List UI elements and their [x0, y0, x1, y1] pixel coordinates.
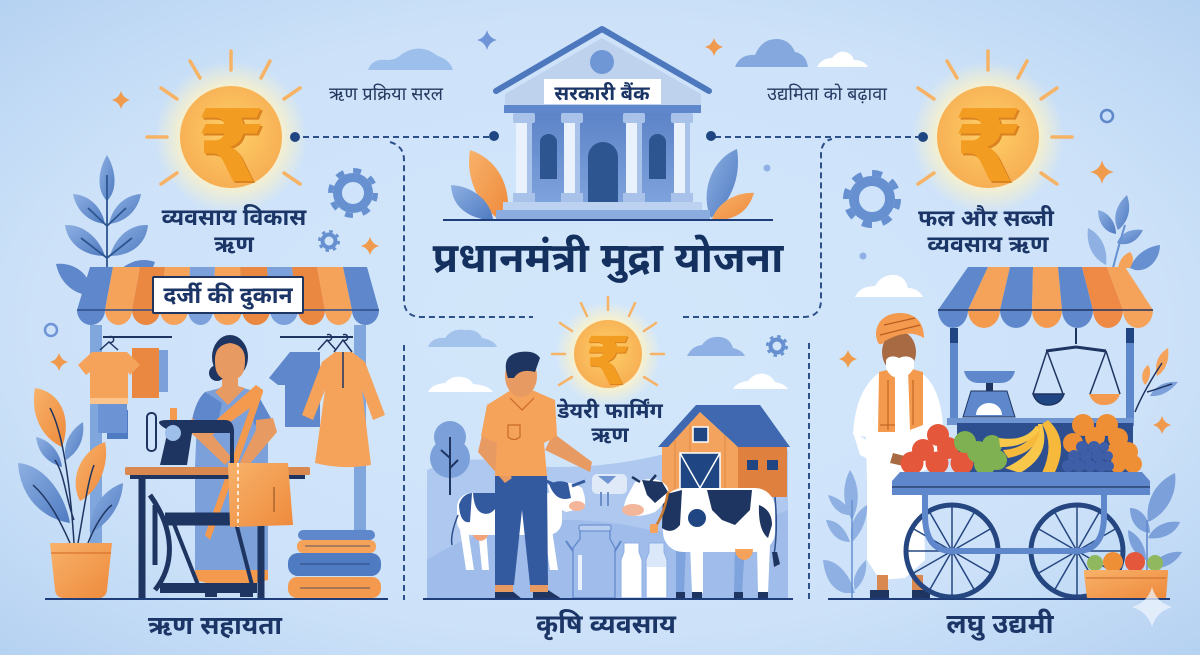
- fruit basket: [1084, 552, 1168, 598]
- connector dots: [290, 131, 928, 142]
- text: business growth loan: व्यवसाय विकास: [161, 204, 307, 230]
- farmer vendor: [853, 313, 945, 598]
- text: business growth loan: ऋण: [214, 231, 254, 257]
- steps: [503, 202, 702, 210]
- farmer man: [478, 352, 592, 599]
- columns: [513, 113, 693, 202]
- balance: [1033, 328, 1120, 405]
- title: प्रधानमंत्री मुद्रा योजना: [433, 234, 784, 283]
- icon: right rupee coin: ₹: [953, 88, 1023, 205]
- text: dairy farming loan: डेयरी फार्मिंग: [556, 398, 663, 423]
- hanging clothes left: [78, 336, 168, 439]
- label: agri business: कृषि व्यवसाय: [536, 609, 677, 640]
- icon: left rupee coin: ₹: [196, 88, 266, 205]
- panel: dairy farm: [427, 352, 790, 599]
- orange cloth: [228, 463, 293, 527]
- text: dairy farming loan: ऋण: [591, 423, 629, 447]
- shop sign: दर्जी की दुकान: [163, 282, 294, 310]
- right foliage: [1128, 473, 1182, 570]
- dairy ground line: [423, 598, 793, 600]
- weighing scale: [963, 371, 1015, 417]
- icon: right rupee coin: ₹: [955, 90, 1025, 207]
- label: small entrepreneur: लघु उद्यमी: [946, 608, 1055, 640]
- bank ground line: [443, 219, 773, 221]
- door and windows: [540, 134, 666, 202]
- bank building: [451, 29, 754, 220]
- icon: centre rupee coin: ₹: [586, 324, 632, 401]
- leaves beside bank: [451, 149, 754, 220]
- tree: [430, 421, 470, 495]
- shop sign: [153, 277, 303, 313]
- cart table: [892, 472, 1150, 495]
- clouds and sparkles: [45, 30, 1171, 434]
- bank sign: [544, 79, 661, 105]
- text: fruit and vegetable loan: व्यवसाय ऋण: [927, 231, 1049, 257]
- panel: tailor shop: [18, 155, 385, 598]
- panel: fruit vendor: [823, 195, 1182, 598]
- main cow: [622, 475, 780, 599]
- bank sign: सरकारी बैंक: [554, 81, 650, 105]
- hanging clothes right: [269, 334, 385, 467]
- icon: gears: [319, 170, 898, 356]
- tailor ground line: [45, 598, 388, 600]
- milk can and bottles: [566, 525, 667, 598]
- left foliage: [823, 470, 867, 598]
- wall: [530, 113, 676, 202]
- dashed connector lines: [303, 137, 918, 600]
- plant behind shop: [56, 155, 155, 296]
- barn: [658, 405, 790, 497]
- hanging rods: [103, 336, 353, 338]
- fabric stack: [288, 530, 381, 598]
- text: promoting entrepreneurship: उद्यमिता को बढ़ावा: [767, 84, 887, 104]
- awning: [77, 267, 379, 325]
- text: fruit and vegetable loan: फल और सब्जी: [918, 205, 1055, 231]
- cart back and posts: [947, 328, 1134, 473]
- fruits: [900, 414, 1142, 475]
- roof: [505, 38, 701, 105]
- shop posts: [90, 325, 366, 598]
- label: loan support: ऋण सहायता: [148, 610, 283, 640]
- cart wheels: [906, 495, 1123, 597]
- icon: centre rupee coin: ₹: [585, 323, 631, 400]
- icon: left rupee coin: [147, 51, 307, 213]
- tailor woman: [188, 335, 277, 597]
- text: loan process simple: ऋण प्रक्रिया सरल: [329, 84, 444, 104]
- sparkle watermark: [1132, 587, 1172, 627]
- icon: centre rupee coin: [552, 297, 664, 406]
- cow behind man: [452, 481, 585, 570]
- icon: left rupee coin: ₹: [198, 90, 268, 207]
- icon: right rupee coin: [912, 51, 1072, 213]
- vendor ground line: [828, 598, 1170, 600]
- plant behind cart: [1088, 195, 1178, 412]
- plant in pot: [18, 388, 123, 598]
- cart awning: [938, 267, 1153, 328]
- sewing machine and table: [125, 408, 310, 598]
- field: [427, 450, 788, 599]
- entablature: [504, 105, 701, 113]
- small distant cow: [592, 474, 627, 506]
